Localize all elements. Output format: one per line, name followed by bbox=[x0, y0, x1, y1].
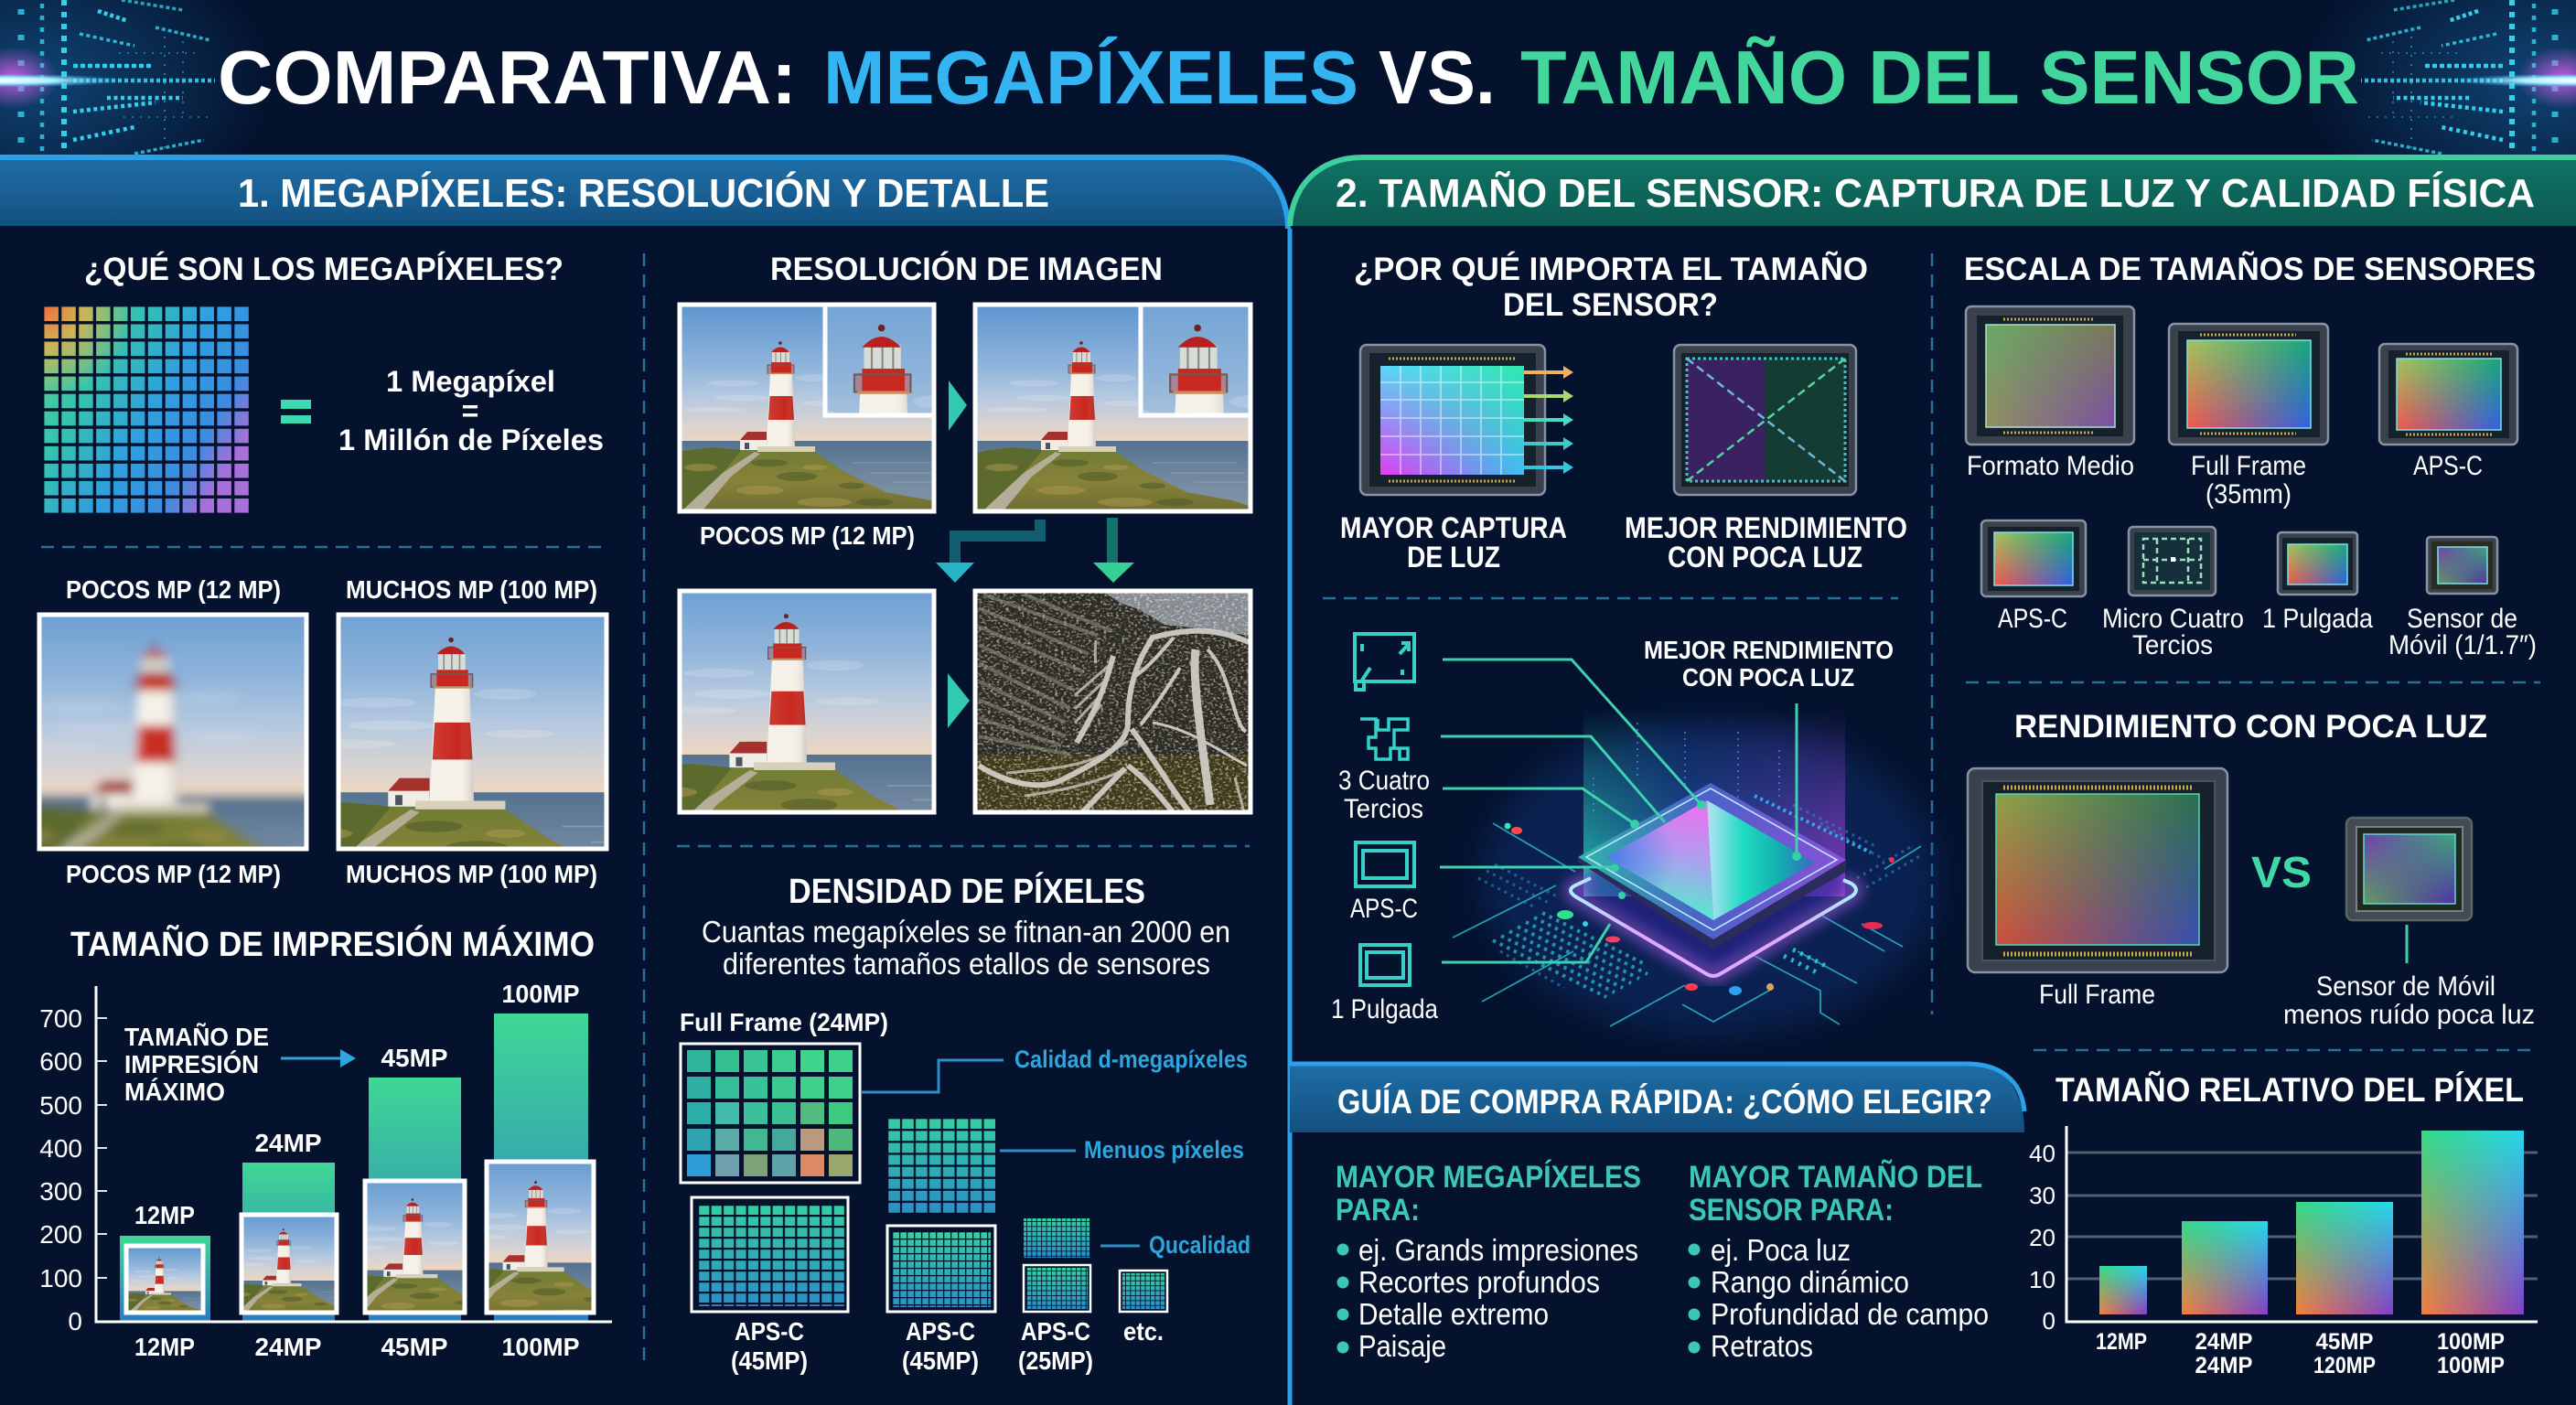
heading: resolución: RESOLUCIÓN DE IMAGEN bbox=[770, 251, 1163, 287]
icon: sensor outline 1 bbox=[1355, 634, 1414, 690]
heading: poca luz: RENDIMIENTO CON POCA LUZ bbox=[2014, 709, 2487, 745]
sensor: full frame bbox=[2169, 324, 2328, 509]
grid labels: APS-C bbox=[735, 1317, 804, 1346]
arrow: right, upper bbox=[949, 381, 967, 431]
arrow: elbow down bbox=[936, 520, 1040, 583]
grid labels bbox=[731, 1317, 1164, 1375]
label: mejor rendimiento bbox=[1625, 511, 1907, 574]
bar chart: pixel size: 100MP bbox=[2437, 1329, 2505, 1355]
photo with inset, top left bbox=[586, 242, 1304, 694]
section header: sensor bbox=[1290, 157, 2576, 226]
sensor: móvil bbox=[2388, 537, 2537, 660]
neon outline bbox=[1571, 855, 1856, 976]
section header: megapíxeles: 1. MEGAPÍXELES: RESOLUCIÓN Y DETALLE bbox=[238, 170, 1049, 216]
sensor: APS-C small: APS-C bbox=[1998, 604, 2067, 634]
sensor: móvil: Móvil (1/1.7″) bbox=[2388, 630, 2537, 660]
bar chart: pixel size bbox=[2029, 1126, 2538, 1378]
list: mayor megapíxeles: PARA: bbox=[1336, 1193, 1420, 1228]
heading: escala: ESCALA DE TAMAÑOS DE SENSORES bbox=[1964, 252, 2536, 287]
list: mayor megapíxeles: Paisaje bbox=[1358, 1329, 1446, 1363]
grid labels: APS-C bbox=[906, 1317, 975, 1346]
pixel grid bbox=[41, 304, 252, 516]
photo: over-sharpened texture bbox=[973, 589, 1252, 814]
block: resolución de imagen: POCOS MP (12 MP) bbox=[700, 521, 915, 550]
sensor: micro cuatro tercios: Micro Cuatro bbox=[2102, 604, 2244, 634]
bar chart: print size: 100MP bbox=[501, 980, 580, 1008]
pixel grid: etc bbox=[1120, 1271, 1167, 1312]
sensor: full frame: Full Frame bbox=[2191, 451, 2306, 481]
bar chart: pixel size: 30 bbox=[2029, 1182, 2055, 1209]
list: mayor tamaño del sensor: Rango dinámico bbox=[1711, 1265, 1909, 1299]
title: COMPARATIVA: bbox=[218, 35, 797, 120]
callout: calidad bbox=[861, 1046, 1248, 1092]
photo: sharp lighthouse bbox=[233, 577, 763, 909]
callout: qucalidad: Qucalidad bbox=[1149, 1231, 1250, 1259]
label: mejor rendimiento: MEJOR RENDIMIENTO bbox=[1625, 511, 1907, 544]
list: mayor megapíxeles bbox=[1336, 1160, 1641, 1363]
arrow: straight down bbox=[1093, 518, 1134, 583]
sensor: full frame: (35mm) bbox=[2206, 479, 2292, 509]
icon: 1 inch frame bbox=[1360, 945, 1410, 985]
photo: bottom left bbox=[590, 559, 1068, 861]
callout: calidad: Calidad d-megapíxeles bbox=[1014, 1046, 1248, 1073]
callout: tamaño de impresión bbox=[124, 1023, 356, 1106]
pixel grid: small unframed bbox=[1024, 1218, 1089, 1258]
block: densidad de píxeles bbox=[680, 871, 1250, 1375]
bar chart: print size: 45MP bbox=[381, 1333, 448, 1361]
label: mayor captura: DE LUZ bbox=[1407, 541, 1500, 574]
sensor: formato medio bbox=[1966, 306, 2134, 481]
label: 3 cuatro tercios: 3 Cuatro bbox=[1338, 766, 1430, 796]
sensor: micro cuatro tercios bbox=[2102, 527, 2244, 660]
bar chart: print size: 45MP bbox=[381, 1044, 448, 1072]
bar chart: print size: 100 bbox=[39, 1264, 82, 1292]
bar chart: pixel size: 24MP bbox=[2195, 1353, 2252, 1378]
callout: tamaño de impresión: TAMAÑO DE bbox=[124, 1023, 269, 1051]
label: APS-C: APS-C bbox=[1350, 894, 1418, 924]
sensor: large full frame bbox=[1968, 768, 2227, 972]
block: tamaño relativo del píxel bbox=[2029, 1070, 2538, 1378]
bar chart: print size: 400 bbox=[39, 1134, 82, 1163]
list: mayor tamaño del sensor: SENSOR PARA: bbox=[1689, 1193, 1894, 1228]
illustration: glowing sensor with callouts bbox=[1331, 634, 1939, 1034]
labels: low light: Full Frame bbox=[2039, 980, 2155, 1010]
callout: mejor rendimiento: MEJOR RENDIMIENTO bbox=[1644, 636, 1894, 664]
bar chart: print size: 100MP bbox=[501, 1333, 580, 1361]
comparison: pocos vs muchos MP: POCOS MP (12 MP) bbox=[66, 575, 281, 604]
chip diamond bbox=[1578, 783, 1846, 949]
callout: mejor rendimiento bbox=[1644, 636, 1894, 692]
list: mayor tamaño del sensor: Retratos bbox=[1711, 1329, 1813, 1363]
heading: impresión: TAMAÑO DE IMPRESIÓN MÁXIMO bbox=[70, 924, 595, 964]
bar chart: print size bbox=[39, 980, 699, 1361]
photo: blurred lighthouse bbox=[0, 580, 465, 912]
bar chart: pixel size: 40 bbox=[2029, 1140, 2055, 1167]
title: MEGAPÍXELES bbox=[823, 35, 1358, 120]
sensor: APS-C: APS-C bbox=[2413, 451, 2483, 481]
comparison: pocos vs muchos MP: MUCHOS MP (100 MP) bbox=[346, 575, 597, 604]
pixel grid: medium density bbox=[886, 1117, 995, 1213]
bar chart: pixel size: 45MP bbox=[2316, 1329, 2373, 1355]
icon: APS-C frame bbox=[1356, 842, 1414, 886]
grid labels: APS-C bbox=[1021, 1317, 1090, 1346]
heading: por qué importa: DEL SENSOR? bbox=[1503, 287, 1718, 323]
sensor: small phone bbox=[2346, 818, 2472, 963]
bar chart: print size: 24MP bbox=[254, 1129, 322, 1157]
photo with inset, top right bbox=[900, 242, 1624, 694]
list: mayor megapíxeles: ej. Grands impresiones bbox=[1358, 1233, 1638, 1267]
bar chart: pixel size: 20 bbox=[2029, 1224, 2055, 1251]
bar chart: print size: 600 bbox=[39, 1047, 82, 1076]
labels: low light bbox=[2039, 971, 2535, 1030]
header: guía: GUÍA DE COMPRA RÁPIDA: ¿CÓMO ELEGIR? bbox=[1337, 1082, 1992, 1121]
definition text: 1 Megapíxel bbox=[386, 365, 555, 398]
bar chart: print size: 0 bbox=[68, 1307, 82, 1335]
sensor: formato medio: Formato Medio bbox=[1967, 451, 2134, 481]
sensor: 1 pulgada bbox=[2262, 532, 2373, 634]
bar chart: pixel size: 100MP bbox=[2437, 1353, 2505, 1378]
sensor chip: low light bbox=[1674, 345, 1856, 495]
list: mayor tamaño del sensor: MAYOR TAMAÑO DEL bbox=[1689, 1160, 1982, 1195]
indicator lights bbox=[1504, 823, 1894, 995]
bar chart: print size: 12MP bbox=[134, 1201, 195, 1229]
list: mayor tamaño del sensor: Profundidad de campo bbox=[1711, 1297, 1989, 1331]
bar chart: print size: 700 bbox=[39, 1004, 82, 1033]
bar chart: print size: 12MP bbox=[134, 1333, 195, 1361]
callout: menos píxeles: Menuos píxeles bbox=[1084, 1136, 1244, 1164]
block: tamaño de impresión máximo bbox=[39, 924, 699, 1361]
definition text: = bbox=[462, 394, 478, 427]
list: mayor tamaño del sensor bbox=[1689, 1160, 1989, 1363]
bar chart: pixel size: 0 bbox=[2043, 1307, 2055, 1335]
pixel grid: full frame bbox=[681, 1044, 860, 1183]
grid labels: (45MP) bbox=[731, 1346, 808, 1375]
equals sign bbox=[281, 400, 311, 424]
decoration: digital pixel streams, right corner bbox=[2302, 0, 2576, 236]
label: VS: VS bbox=[2251, 849, 2312, 897]
label: mayor captura: MAYOR CAPTURA bbox=[1340, 511, 1567, 544]
list: mayor megapíxeles: Recortes profundos bbox=[1358, 1265, 1600, 1299]
bar chart: pixel size: 10 bbox=[2029, 1266, 2055, 1293]
header: guía bbox=[1290, 1063, 2024, 1132]
arrow: right, lower bbox=[948, 673, 970, 728]
callout: tamaño de impresión: IMPRESIÓN bbox=[124, 1050, 259, 1078]
bar chart: pixel size: 12MP bbox=[2096, 1329, 2147, 1355]
panel: 1. megapíxeles bbox=[0, 157, 1624, 1375]
sensor: micro cuatro tercios: Tercios bbox=[2132, 630, 2213, 660]
block: densidad de píxeles: Full Frame (24MP) bbox=[680, 1008, 888, 1036]
bar chart: print size: 200 bbox=[39, 1220, 82, 1249]
bar chart: print size: 24MP bbox=[254, 1333, 322, 1361]
grid labels: etc. bbox=[1123, 1317, 1164, 1346]
bar chart: print size: 500 bbox=[39, 1091, 82, 1120]
callout: mejor rendimiento: CON POCA LUZ bbox=[1682, 663, 1854, 692]
icon: four thirds chip bbox=[1360, 719, 1408, 759]
definition text: 1 Millón de Píxeles bbox=[338, 424, 604, 456]
list: mayor megapíxeles: MAYOR MEGAPÍXELES bbox=[1336, 1160, 1641, 1195]
bar chart: pixel size: 24MP bbox=[2195, 1329, 2252, 1355]
list: mayor megapíxeles: Detalle extremo bbox=[1358, 1297, 1549, 1331]
label: 3 cuatro tercios bbox=[1338, 766, 1430, 824]
sensor: APS-C bbox=[2379, 344, 2517, 481]
section header: sensor: 2. TAMAÑO DEL SENSOR: CAPTURA DE LUZ Y CALIDAD FÍSICA bbox=[1336, 170, 2535, 216]
panel: 2. tamaño del sensor bbox=[1290, 157, 2576, 1405]
description: Cuantas megapíxeles se fitnan-an 2000 en bbox=[702, 915, 1230, 949]
description: diferentes tamaños etallos de sensores bbox=[723, 947, 1210, 981]
section header: megapíxeles bbox=[0, 157, 1288, 229]
block: escala de tamaños bbox=[1964, 252, 2537, 660]
heading: densidad: DENSIDAD DE PÍXELES bbox=[789, 871, 1145, 911]
heading: píxel: TAMAÑO RELATIVO DEL PÍXEL bbox=[2055, 1070, 2524, 1109]
grid labels: (45MP) bbox=[902, 1346, 979, 1375]
sensor: móvil: Sensor de bbox=[2407, 604, 2517, 634]
block: resolución de imagen bbox=[586, 242, 1624, 861]
heading: qué son: ¿QUÉ SON LOS MEGAPÍXELES? bbox=[84, 251, 564, 287]
comparison: pocos vs muchos MP bbox=[0, 575, 763, 912]
comparison: pocos vs muchos MP: MUCHOS MP (100 MP) bbox=[346, 860, 597, 888]
description bbox=[702, 915, 1230, 981]
circuit traces bbox=[1453, 723, 1921, 1026]
labels: low light: Sensor de Móvil bbox=[2316, 971, 2496, 1002]
callout lines bbox=[1440, 660, 1797, 962]
title: VS. bbox=[1379, 35, 1496, 120]
block: por qué importa bbox=[1340, 251, 1907, 574]
decoration: digital pixel streams, left corner bbox=[0, 0, 274, 236]
definition text bbox=[338, 365, 604, 456]
comparison: pocos vs muchos MP: POCOS MP (12 MP) bbox=[66, 860, 281, 888]
title: TAMAÑO DEL SENSOR bbox=[1520, 35, 2359, 120]
label: mayor captura bbox=[1340, 511, 1567, 574]
sensor chip: light capture bbox=[1360, 345, 1573, 495]
pixel grid: APS-C large bbox=[692, 1197, 848, 1312]
block: qué son los megapíxeles bbox=[41, 251, 604, 516]
block: rendimiento con poca luz bbox=[1968, 709, 2535, 1030]
bar chart: print size: 300 bbox=[39, 1177, 82, 1206]
panel: guía de compra bbox=[1290, 1063, 2024, 1363]
list: mayor tamaño del sensor: ej. Poca luz bbox=[1711, 1233, 1851, 1267]
heading: por qué importa: ¿POR QUÉ IMPORTA EL TAMAÑO bbox=[1354, 251, 1868, 287]
bar chart: pixel size: 120MP bbox=[2313, 1353, 2376, 1378]
heading: por qué importa bbox=[1354, 251, 1868, 323]
callout: tamaño de impresión: MÁXIMO bbox=[124, 1078, 225, 1106]
labels: low light: menos ruído poca luz bbox=[2283, 1000, 2535, 1030]
title bbox=[218, 35, 2359, 120]
sensor: APS-C small bbox=[1981, 520, 2086, 634]
pixel grid: APS-C small bbox=[1024, 1265, 1090, 1312]
label: mejor rendimiento: CON POCA LUZ bbox=[1668, 541, 1862, 574]
pixel grid: APS-C medium bbox=[887, 1226, 995, 1312]
label: 1 pulgada: 1 Pulgada bbox=[1331, 994, 1438, 1024]
grid labels: (25MP) bbox=[1018, 1346, 1093, 1375]
sensor: 1 pulgada: 1 Pulgada bbox=[2262, 604, 2373, 634]
label: 3 cuatro tercios: Tercios bbox=[1344, 794, 1423, 824]
